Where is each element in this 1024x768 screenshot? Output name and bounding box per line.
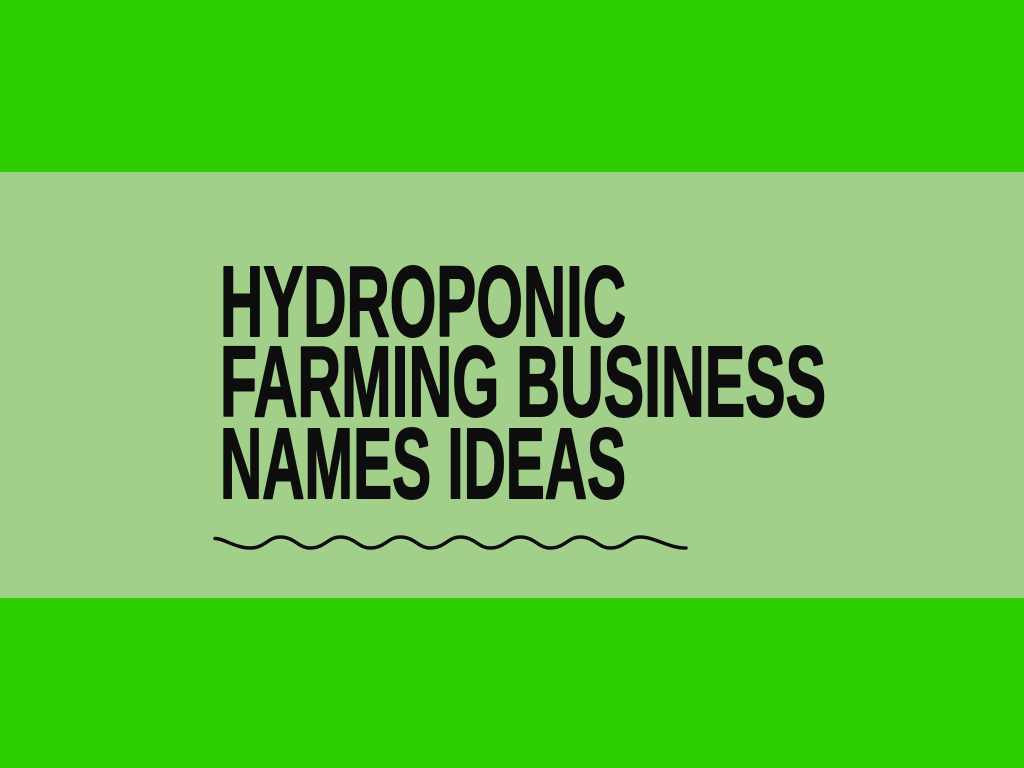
wavy underline	[215, 537, 686, 548]
top green band	[0, 0, 1024, 172]
title: HYDROPONIC	[220, 246, 626, 358]
middle light green panel	[0, 172, 1024, 598]
title	[220, 246, 826, 520]
title: NAMES IDEAS	[220, 408, 626, 520]
bottom green band	[0, 598, 1024, 768]
